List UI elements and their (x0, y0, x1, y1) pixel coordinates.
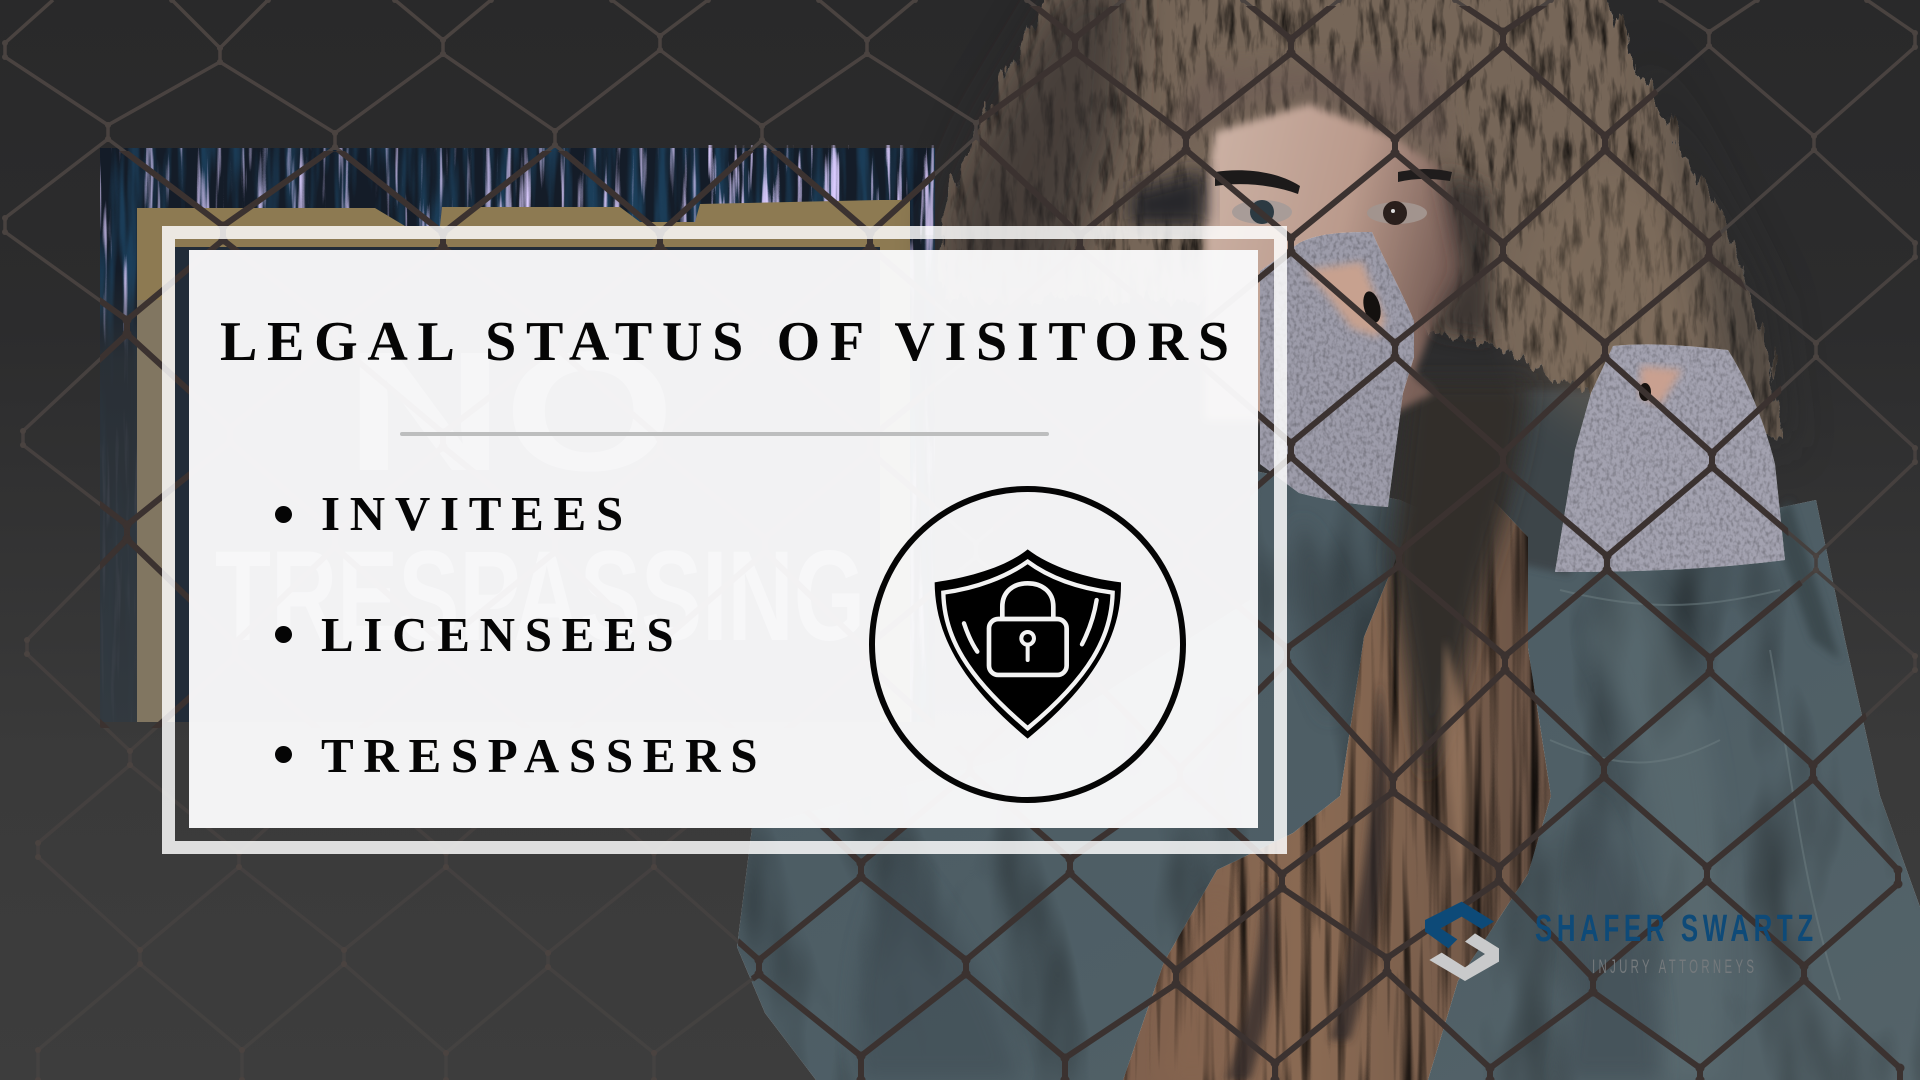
no trespassing sign: NO (345, 317, 675, 507)
list item: trespassers: TRESPASSERS (321, 728, 767, 783)
logo: Shafer Swartz Injury Attorneys: SHAFER SWARTZ (1535, 907, 1813, 949)
bullet: licensees (275, 626, 292, 643)
fur hood (943, 0, 1790, 450)
exposed nose (1305, 262, 1385, 337)
shadowed sleeve beside hair (1500, 390, 1600, 575)
knit mask glove (1260, 232, 1414, 507)
right knit glove (1555, 344, 1785, 572)
no trespassing sign (100, 145, 935, 722)
no trespassing sign: TRESPASSING (215, 525, 865, 668)
long brown hair (1123, 500, 1551, 1080)
outer white frame (162, 226, 1287, 854)
woman in hooded jacket (737, 0, 1920, 1080)
divider line (400, 432, 1049, 436)
white content panel (189, 250, 1258, 828)
title: LEGAL STATUS OF VISITORS (220, 311, 1239, 373)
bullet: trespassers (275, 746, 292, 763)
logo: Shafer Swartz Injury Attorneys: INJURY ATTORNEYS (1592, 957, 1754, 978)
bullet: invitees (275, 506, 292, 523)
jacket (737, 470, 1920, 1080)
list item: invitees: INVITEES (321, 486, 633, 541)
list item: licensees: LICENSEES (321, 607, 683, 662)
face (1130, 104, 1490, 420)
